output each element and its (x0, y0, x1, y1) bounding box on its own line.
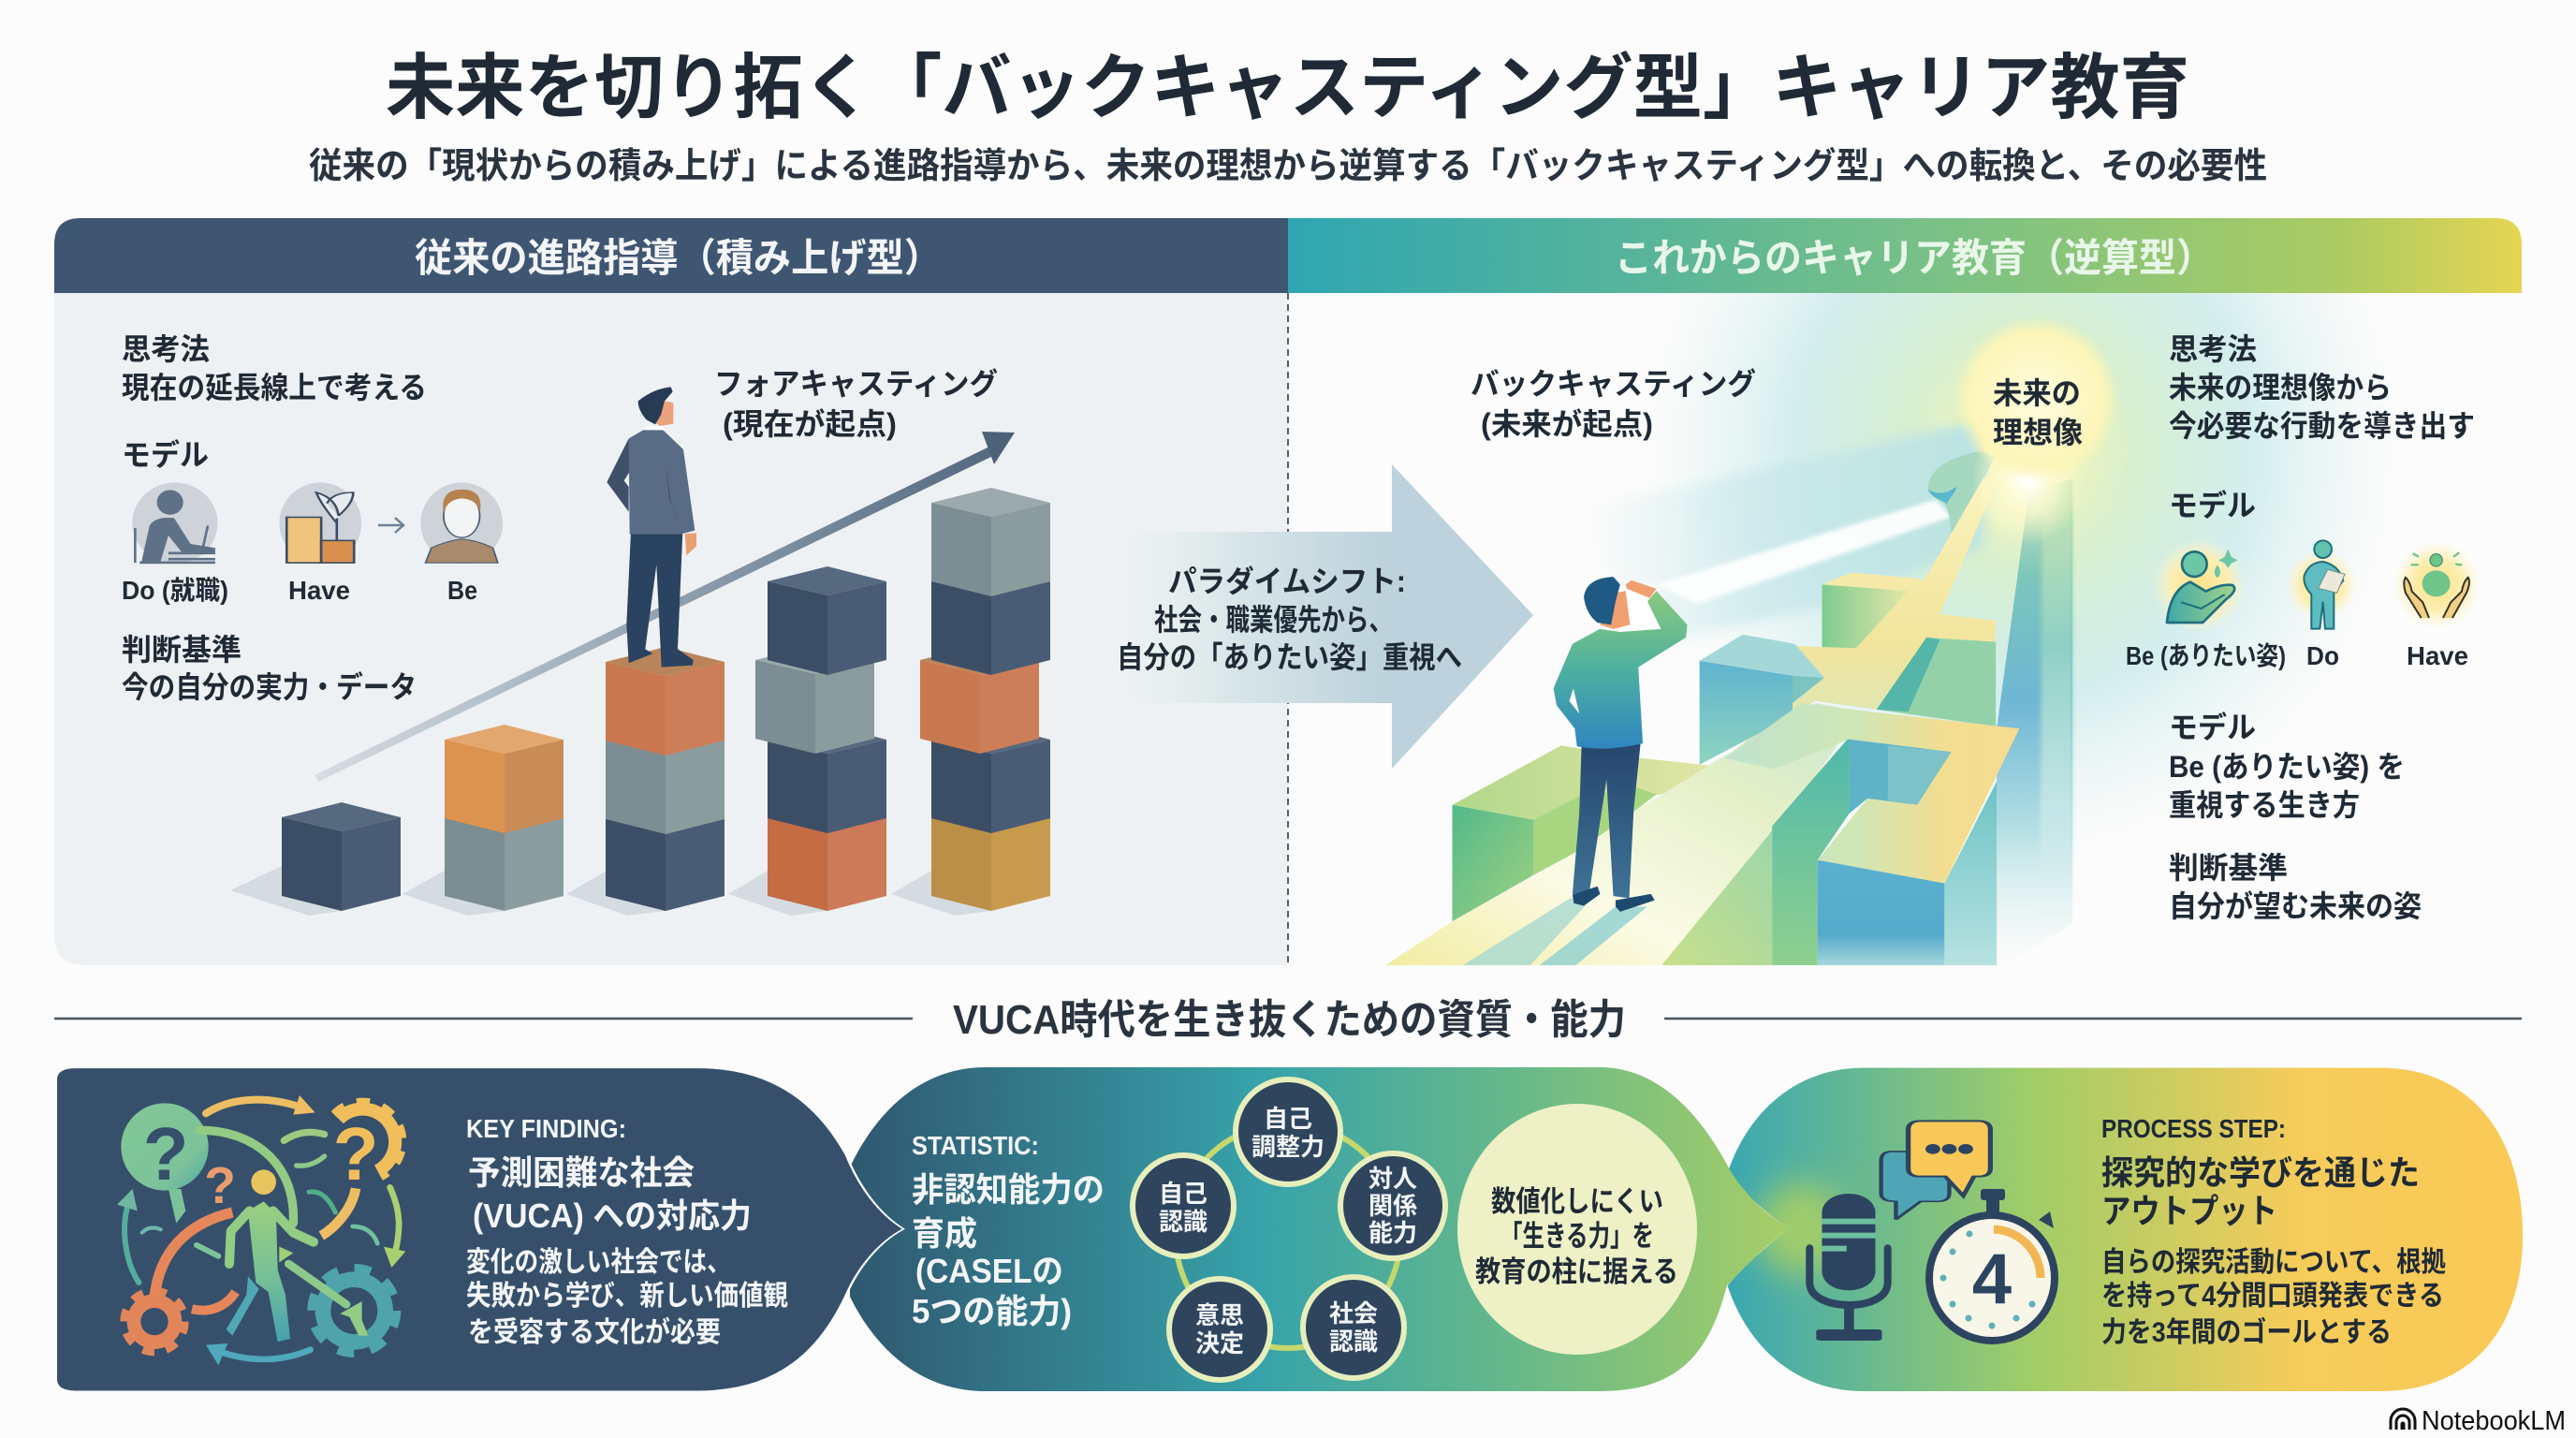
text: thinking method: 思考法 (122, 332, 210, 366)
light rays (1625, 419, 1988, 638)
column 4 (755, 566, 886, 911)
column 3 (606, 647, 724, 911)
competency: relationship skills: 対人 (1368, 1165, 1417, 1193)
competency: social awareness: 認識 (1329, 1328, 1378, 1356)
logo: NotebookLM: NotebookLM (2422, 1406, 2566, 1436)
green block front (1452, 805, 1534, 921)
labels: Be Do Have: Be (ありたい姿) (2126, 641, 2286, 670)
callout: life skills: 教育の柱に据える (1475, 1255, 1678, 1288)
white ray (1657, 500, 1952, 604)
glow (1689, 293, 2355, 805)
lower blue block (1818, 860, 1944, 966)
question marks: ? (333, 1112, 378, 1196)
icon: Have hands (2393, 541, 2481, 629)
text: statistic (912, 1131, 1105, 1330)
blue block (1700, 661, 1793, 765)
text: statistic: (CASELの (915, 1252, 1063, 1290)
man's shadows (1461, 898, 1588, 966)
column 1 (282, 802, 401, 911)
figure: man standing on blocks (607, 387, 696, 668)
label: forecasting: フォアキャスティング (714, 367, 998, 401)
cream walkway (1384, 703, 1861, 966)
labels: Be Do Have: Have (2407, 641, 2468, 670)
chart: stacked blocks (282, 488, 1050, 911)
text: decision criteria: 自分が望む未来の姿 (2169, 889, 2422, 923)
label: backcasting: バックキャスティング (1471, 367, 1756, 401)
text: model label: モデル (122, 438, 209, 472)
panel: traditional guidance (54, 218, 1288, 965)
gears (124, 1102, 402, 1354)
divider: dashed centre line (1287, 293, 1289, 965)
arcs and arrows (117, 1095, 405, 1365)
text: statistic: 育成 (912, 1214, 977, 1253)
question marks (143, 1112, 378, 1214)
text: key finding: 失敗から学び、新しい価値観 (466, 1281, 788, 1312)
text: model description: モデル (2169, 711, 2256, 744)
competency: social awareness (1303, 1277, 1404, 1378)
icon: Do figure (2286, 540, 2357, 629)
text: process step: 力を3年間のゴールとする (2101, 1316, 2392, 1348)
icon: VUCA uncertainty collage (117, 1095, 405, 1365)
left panel background (54, 293, 1288, 965)
green question bubble (121, 1103, 209, 1191)
labels: Be Do Have (2126, 641, 2468, 670)
upper green block (1822, 584, 1910, 648)
subtitle: 従来の「現状からの積み上げ」による進路指導から、未来の理想から逆算する「バックキャスティング型」への転換と、その必要性 (309, 147, 2267, 186)
right panel header bar (1288, 218, 2522, 293)
right panel heading: これからのキャリア教育（逆算型） (1615, 236, 2214, 280)
competency: self-awareness: 認識 (1159, 1208, 1208, 1236)
callout: life skills: 数値化しにくい (1491, 1185, 1663, 1218)
competency: decision making: 意思 (1195, 1301, 1244, 1329)
label: backcasting (1471, 367, 1756, 441)
column 2 (445, 725, 564, 911)
block shadows (230, 866, 991, 916)
icon: Do person at desk (132, 482, 218, 564)
panel: process step (right band) (1728, 1068, 2523, 1391)
text: decision criteria: 判断基準 (2169, 851, 2288, 885)
text: process step: 自らの探究活動について、根拠 (2101, 1247, 2446, 1278)
competency: decision making (1169, 1279, 1270, 1380)
text: paradigm shift: 社会・職業優先から、 (1154, 603, 1393, 637)
label: forecasting (714, 367, 998, 441)
text: process step: アウトプット (2101, 1192, 2277, 1230)
text: statistic: 5つの能力) (912, 1292, 1072, 1330)
text: decision criteria: 判断基準 (122, 633, 242, 667)
text: process step (2101, 1114, 2446, 1348)
left panel heading: 従来の進路指導（積み上げ型） (415, 236, 942, 280)
text: thinking method (122, 332, 427, 404)
callout: life skills (1457, 1104, 1697, 1355)
text: paradigm shift (1117, 565, 1462, 674)
text: key finding: 変化の激しい社会では、 (466, 1247, 731, 1278)
icon: Be portrait (420, 482, 503, 564)
text: thinking method: 未来の理想像から (2169, 371, 2392, 404)
hand shape (1928, 451, 1994, 534)
competency: decision making: 決定 (1195, 1329, 1244, 1357)
light column (1997, 478, 2072, 970)
column 5 (920, 488, 1050, 911)
question marks: ? (204, 1156, 236, 1214)
labels: Do Have Be (122, 576, 477, 605)
right upper block face (1877, 638, 1996, 726)
icon: four-minute stopwatch: 4 (1972, 1240, 2012, 1319)
labels: Do Have Be: Have (288, 576, 350, 605)
text: decision criteria (2169, 851, 2422, 923)
text: future ideal: 理想像 (1993, 416, 2083, 449)
label: forecasting: (現在が起点) (723, 407, 897, 441)
opening in the stepped path (1850, 740, 1952, 814)
competency: relationship skills: 関係 (1368, 1192, 1417, 1220)
competency: social awareness: 社会 (1329, 1299, 1378, 1328)
callout: life skills: 「生きる力」を (1500, 1220, 1654, 1253)
yellow stepped path (1724, 703, 2019, 884)
text: model label: モデル (2169, 489, 2256, 522)
panel: statistic (middle band) (850, 1067, 1789, 1391)
labels: Be Do Have: Do (2306, 641, 2339, 670)
sun (1954, 316, 2119, 481)
labels: Do Have Be: Do (就職) (122, 576, 228, 605)
label: backcasting: (未来が起点) (1481, 407, 1653, 441)
central wall (1661, 824, 1774, 965)
section heading: VUCA: VUCA時代を生き抜くための資質・能力 (953, 997, 1626, 1043)
text: key finding (466, 1114, 788, 1348)
text: model description (2169, 711, 2405, 822)
icon: Have possessions (279, 482, 361, 564)
arrow: Have to Be (378, 518, 403, 533)
walking figure (227, 1169, 368, 1342)
text: statistic: STATISTIC: (912, 1131, 1039, 1160)
arrow: forecasting trend (315, 432, 1015, 782)
panel: key finding (left band) (56, 1068, 903, 1391)
panel: future career education (1288, 218, 2522, 965)
text: key finding: 予測困難な社会 (468, 1153, 695, 1192)
diagram: CASEL five competencies (1133, 1079, 1445, 1380)
competency: relationship skills: 能力 (1368, 1219, 1417, 1247)
question marks: ? (143, 1112, 188, 1196)
text: thinking method: 現在の延長線上で考える (122, 371, 427, 404)
text: thinking method (2169, 332, 2475, 443)
text: future ideal (1993, 376, 2083, 449)
competency: self-management (1236, 1079, 1340, 1184)
text: model description: 重視する生き方 (2169, 788, 2360, 822)
text: process step: 探究的な学びを通じた (2101, 1153, 2420, 1192)
man looking at the future (1554, 577, 1688, 912)
title: 未来を切り拓く「バックキャスティング型」キャリア教育 (386, 49, 2189, 128)
text: model description: Be (ありたい姿) を (2169, 750, 2405, 784)
text: decision criteria (122, 633, 417, 704)
text: key finding: (VUCA) への対応力 (473, 1196, 752, 1235)
text: process step: を持って4分間口頭発表できる (2101, 1281, 2444, 1312)
arrow: paradigm shift (1105, 464, 1533, 769)
text: paradigm shift: 自分の「ありたい姿」重視へ (1117, 640, 1462, 674)
labels: Do Have Be: Be (447, 576, 477, 605)
text: decision criteria: 今の自分の実力・データ (122, 670, 417, 704)
text: thinking method: 思考法 (2169, 332, 2257, 366)
illustration: path toward the ideal future (1385, 293, 2470, 965)
white patch behind head (1623, 584, 1661, 631)
text: paradigm shift: パラダイムシフト: (1168, 565, 1406, 598)
competency: self-awareness: 自己 (1159, 1180, 1208, 1208)
flare below the sun (1975, 452, 2074, 541)
text: thinking method: 今必要な行動を導き出す (2169, 409, 2475, 443)
text: key finding: KEY FINDING: (466, 1114, 626, 1143)
competency: self-management: 自己 (1264, 1105, 1312, 1133)
competency: self-management: 調整力 (1251, 1133, 1325, 1161)
icon: four-minute stopwatch (1929, 1189, 2055, 1341)
icon: microphone (1809, 1194, 1888, 1341)
text: statistic: 非認知能力の (912, 1170, 1105, 1209)
competency: self-awareness (1133, 1155, 1234, 1256)
left panel header bar (54, 218, 1288, 293)
icon: speech bubbles (1881, 1121, 1990, 1220)
upper yellow path (1735, 477, 1996, 749)
icon: Be figure (2153, 538, 2247, 632)
competency: relationship skills (1340, 1153, 1445, 1258)
green blend around the arrow tip (1757, 1182, 1847, 1276)
text: process step: PROCESS STEP: (2101, 1114, 2286, 1143)
text: key finding: を受容する文化が必要 (468, 1316, 721, 1348)
green block top (1453, 745, 1709, 820)
text: future ideal: 未来の (1993, 376, 2081, 410)
